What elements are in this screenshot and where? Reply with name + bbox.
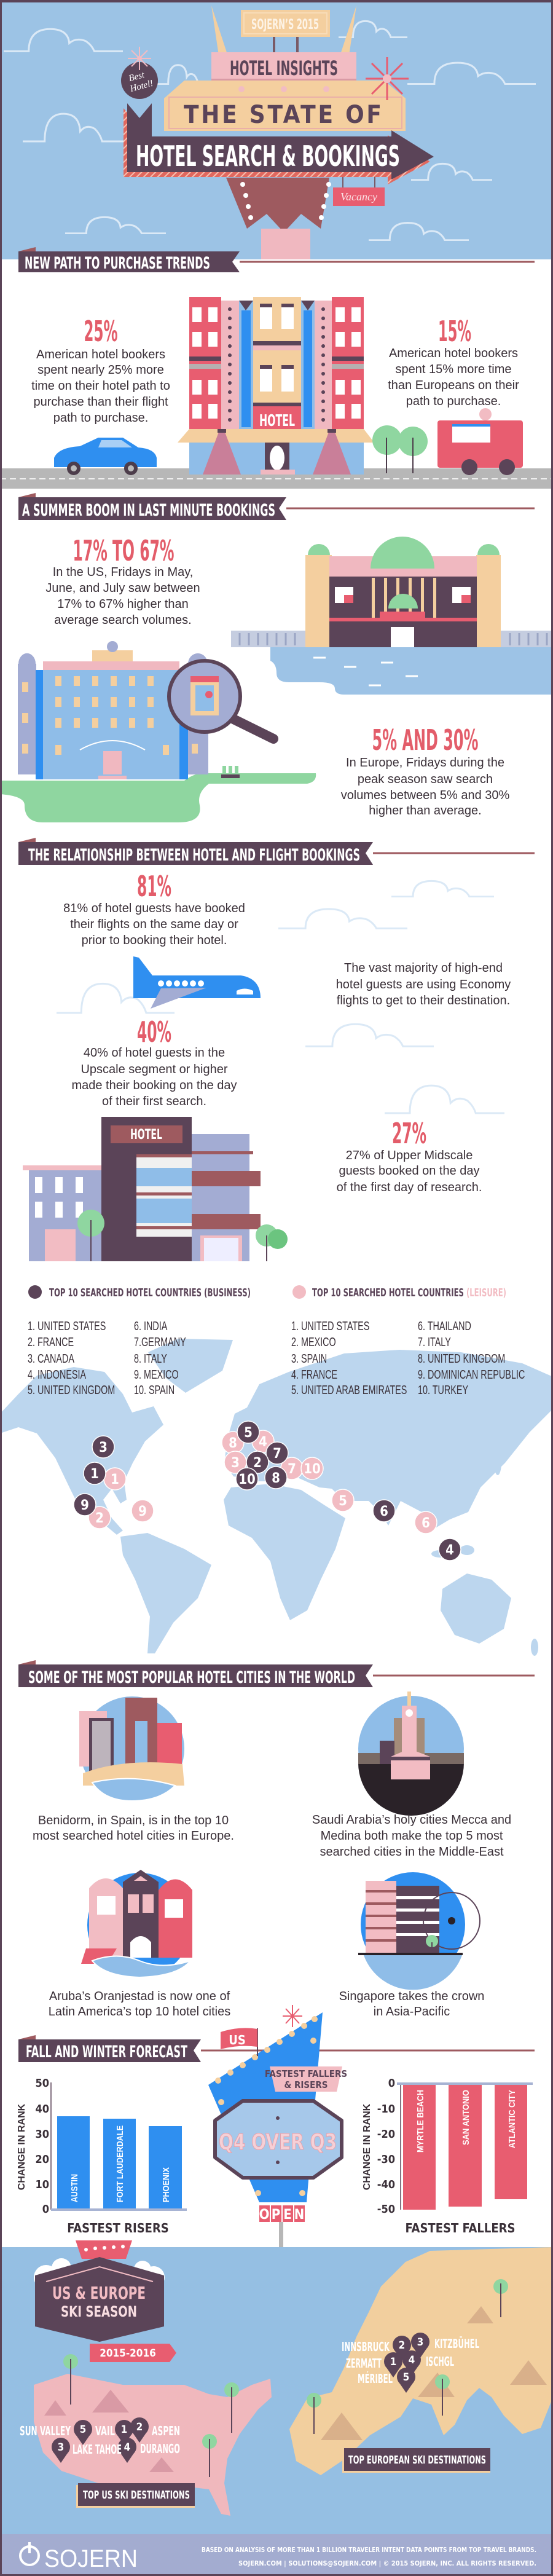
header: sky background [0, 0, 553, 259]
list: leisure countries: 7. ITALY [418, 1335, 451, 1349]
stat: 40% [71, 1015, 237, 1108]
us ski destination pins: SUN VALLEY [20, 2424, 71, 2438]
map markers: business: 5 [244, 1425, 253, 1441]
map markers: leisure: 3 [231, 1455, 240, 1471]
best hotel badge [121, 62, 158, 99]
us ski destination pins: 1 [121, 2424, 127, 2436]
map markers: business: 3 [99, 1440, 108, 1455]
star [283, 2005, 302, 2027]
city icon: benidorm [79, 1696, 184, 1801]
world map [0, 1339, 553, 1656]
map markers: business: 10 [238, 1472, 256, 1487]
stat: 5% and 30%: In Europe, Fridays during the [346, 756, 504, 770]
stat: 15%: than Europeans on their [388, 379, 519, 392]
chart: fastest fallers: -20 [377, 2128, 395, 2141]
ski section background [0, 2247, 553, 2534]
starburst icons [128, 47, 409, 100]
us ski destination pins [20, 2417, 180, 2463]
list: leisure countries: 5. UNITED ARAB EMIRATES [291, 1383, 407, 1397]
european ski destination pins: 2 [399, 2339, 405, 2352]
stat: 17% to 67% [45, 534, 200, 627]
map markers: business: 7 [273, 1446, 281, 1462]
best hotel badge: Hotel! [128, 79, 154, 94]
chart: fastest fallers: SAN ANTONIO [461, 2090, 471, 2145]
text: mecca and medina [312, 1813, 511, 1859]
us ski destination pins: DURANGO [140, 2441, 180, 2456]
chart: fastest fallers: FASTEST FALLERS [406, 2221, 515, 2235]
label: top european ski destinations: TOP EUROPEAN SKI DESTINATIONS [348, 2454, 486, 2467]
list: leisure countries: 3. SPAIN [291, 1352, 327, 1366]
stat: 25% [31, 315, 170, 425]
stat: 81% [63, 870, 245, 947]
legend: top 10 searched hotel countries: TOP 10 SEARCHED HOTEL COUNTRIES (BUSINESS) [49, 1286, 251, 1299]
list: leisure countries: 9. DOMINICAN REPUBLIC [418, 1368, 525, 1382]
section heading: a summer boom: A SUMMER BOOM IN LAST MINUTE BOOKINGS [22, 501, 275, 520]
ski season sign: SKI SEASON [61, 2303, 137, 2320]
city icon: oranjestad aruba [81, 1870, 192, 1977]
arrow: hotel search & bookings [124, 103, 434, 184]
section heading: most popular hotel cities: SOME OF THE MOST POPULAR HOTEL CITIES IN THE WORLD [28, 1668, 355, 1687]
map markers: leisure [88, 1430, 437, 1534]
stat: 27%: 27% of Upper Midscale [346, 1149, 473, 1162]
stat: 5% and 30%: 5% AND 30% [372, 723, 478, 757]
text: mecca and medina: Saudi Arabia’s holy cities Mecca and [312, 1813, 511, 1827]
list: leisure countries: 10. TURKEY [418, 1383, 468, 1397]
chart: fastest risers [17, 2077, 187, 2235]
chart: fastest fallers: -50 [377, 2203, 395, 2216]
european ski destination pins: INNSBRUCK [342, 2339, 390, 2354]
list: business countries [28, 1319, 186, 1397]
stat: 81%: 81% [137, 870, 171, 903]
stat: 17% to 67%: In the US, Fridays in May, [53, 565, 193, 579]
open sign: O [259, 2207, 269, 2223]
illustration: european palace hotel on water [231, 537, 553, 695]
map markers: leisure: 9 [138, 1504, 147, 1519]
hexagon sign: Q4 OVER Q3 [219, 2130, 337, 2155]
center sign: q4 over q3 [208, 2005, 347, 2247]
footer notes: SOJERN.COM | SOLUTIONS@SOJERN.COM | © 2015 SOJERN, INC. ALL RIGHTS RESERVED. [238, 2559, 536, 2567]
map markers: business: 4 [445, 1543, 454, 1558]
chart: fastest risers: FASTEST RISERS [67, 2221, 169, 2235]
european ski destination pins: ZERMATT [346, 2356, 382, 2371]
section heading: fall and winter forecast: FALL AND WINTER FORECAST [26, 2042, 187, 2062]
logo: sojern: SOJERN [44, 2545, 138, 2572]
label: fastest fallers & risers [265, 2066, 347, 2092]
stat: 5% and 30%: volumes between 5% and 30% [341, 789, 510, 802]
stat: 25%: path to purchase. [53, 411, 148, 425]
stat: 25%: American hotel bookers [36, 348, 165, 361]
text: economy flights: The vast majority of high-end [344, 961, 503, 975]
stat: 17% to 67%: 17% TO 67% [73, 534, 175, 567]
stat: 15%: 15% [438, 315, 471, 348]
legend: top 10 searched hotel countries [28, 1285, 506, 1299]
list: business countries: 1. UNITED STATES [28, 1319, 106, 1333]
text: singapore: in Asia-Pacific [374, 2005, 450, 2019]
chart: fastest risers: 0 [42, 2203, 49, 2216]
stat: 81%: prior to booking their hotel. [82, 934, 227, 947]
map markers: leisure: 10 [304, 1462, 321, 1477]
stat: 27% [337, 1117, 482, 1194]
text: aruba: Aruba’s Oranjestad is now one of [49, 1990, 230, 2003]
map markers: business: 8 [272, 1471, 280, 1486]
list: leisure countries: 6. THAILAND [418, 1319, 471, 1333]
map markers: leisure: 1 [111, 1472, 119, 1487]
text: economy flights [336, 961, 511, 1007]
text: aruba [49, 1990, 230, 2019]
label: top european ski destinations [342, 2448, 490, 2473]
chart: fastest risers: 10 [35, 2178, 49, 2191]
list: business countries: 6. INDIA [134, 1319, 168, 1333]
stat: 81%: 81% of hotel guests have booked [63, 902, 245, 915]
footer notes [202, 2546, 536, 2567]
chart: fastest fallers: 0 [388, 2077, 395, 2090]
city icon: singapore [358, 1872, 480, 1990]
chart: fastest fallers: -40 [377, 2178, 395, 2191]
label: fastest fallers & risers: FASTEST FALLERS [265, 2068, 347, 2079]
stat: 17% to 67%: 17% to 67% higher than [57, 597, 189, 611]
flag: us [221, 2028, 257, 2056]
european ski destination pins: 3 [417, 2336, 423, 2349]
ski season sign [34, 2240, 176, 2362]
stat: 17% to 67%: June, and July saw between [45, 581, 200, 595]
label: top us ski destinations: TOP US SKI DESTINATIONS [83, 2489, 190, 2502]
text: benidorm [33, 1814, 234, 1843]
open sign: E [283, 2207, 292, 2223]
list: leisure countries [291, 1319, 525, 1397]
illustration: hotel building: HOTEL [259, 412, 295, 430]
european ski destination pins [342, 2333, 479, 2393]
european ski destination pins: 5 [403, 2371, 409, 2384]
text: economy flights: hotel guests are using Economy [336, 978, 511, 991]
stat: 40%: of their first search. [102, 1095, 206, 1108]
illustration: hotel building [178, 297, 374, 475]
stat: 27%: of the first day of research. [337, 1181, 482, 1194]
us ski destination pins: 2 [136, 2421, 143, 2433]
map markers: leisure: 8 [229, 1436, 237, 1451]
illustration: modern hotel buildings: HOTEL [130, 1127, 162, 1143]
list: leisure countries: 1. UNITED STATES [291, 1319, 369, 1333]
stat: 25%: time on their hotel path to [31, 379, 170, 393]
list: leisure countries: 4. FRANCE [291, 1368, 337, 1382]
chart: fastest fallers: -30 [377, 2153, 395, 2166]
text: singapore: Singapore takes the crown [339, 1990, 484, 2003]
european ski destination pins: 1 [390, 2356, 396, 2368]
stat: 15% [388, 315, 519, 408]
chart: fastest fallers [362, 2077, 533, 2235]
stat: 81%: their flights on the same day or [70, 918, 238, 931]
text: mecca and medina: Medina both make the top 5 most [321, 1829, 503, 1843]
us ski destination pins: 4 [124, 2441, 130, 2454]
hotel insights plaque [211, 52, 356, 82]
ski season sign: US & EUROPE [52, 2283, 146, 2303]
map markers: leisure: 4 [259, 1435, 267, 1450]
chart: fastest risers: 30 [35, 2128, 49, 2141]
vacancy sign: Vacancy [340, 191, 377, 203]
road [0, 468, 553, 489]
chart: fastest risers: 50 [35, 2077, 49, 2090]
sojern 2015 plaque [241, 10, 330, 37]
europe map land [289, 2247, 553, 2475]
city icon: mecca [358, 1692, 464, 1816]
section heading: relationship between hotel and flight bookings [18, 838, 535, 865]
stat: 15%: spent 15% more time [396, 363, 511, 376]
stat: 25%: spent nearly 25% more [37, 363, 164, 377]
map markers: business: 9 [80, 1498, 89, 1513]
map markers: leisure: 7 [288, 1462, 296, 1477]
label: top us ski destinations [76, 2483, 195, 2508]
text: aruba: Latin America’s top 10 hotel cities [49, 2005, 230, 2019]
chart: fastest risers: PHOENIX [161, 2167, 171, 2202]
list: business countries: 2. FRANCE [28, 1335, 74, 1349]
chart: fastest fallers: MYRTLE BEACH [415, 2090, 426, 2153]
stat: 5% and 30%: peak season saw search [358, 773, 493, 786]
title sign [121, 6, 434, 259]
us ski destination pins: 5 [80, 2424, 86, 2436]
chart: fastest risers: AUSTIN [69, 2174, 80, 2202]
stat: 5% and 30%: higher than average. [369, 804, 482, 817]
list: business countries: 10. SPAIN [134, 1383, 175, 1397]
text: singapore [339, 1990, 484, 2019]
W frame and pole [226, 178, 331, 259]
illustration: blue car [54, 438, 157, 475]
us ski destination pins: VAIL [95, 2424, 115, 2438]
map markers: leisure: 5 [339, 1494, 347, 1509]
list: business countries: 9. MEXICO [134, 1368, 179, 1382]
ribbon: 2015-2016 [90, 2344, 176, 2362]
stat: 40%: made their booking on the day [71, 1079, 237, 1092]
logo: sojern [20, 2542, 138, 2572]
map markers: business [74, 1421, 461, 1561]
open sign: N [294, 2207, 304, 2223]
us ski destination pins: ASPEN [152, 2424, 180, 2438]
stat: 25%: purchase than their flight [33, 395, 168, 409]
stat: 40%: 40% [137, 1015, 171, 1049]
list: business countries: 3. CANADA [28, 1352, 74, 1366]
chart: fastest risers: CHANGE IN RANK [17, 2103, 27, 2190]
decorative clouds: flight section [57, 881, 504, 1113]
list: business countries: 4. INDONESIA [28, 1368, 86, 1382]
stat: 27%: guests booked on the day [339, 1164, 480, 1178]
chart: fastest fallers: -10 [377, 2103, 395, 2116]
stat: 25%: 25% [84, 315, 118, 348]
text: benidorm: Benidorm, in Spain, is in the top 10 [38, 1814, 229, 1827]
ribbon: 2015-2016: 2015-2016 [100, 2347, 156, 2360]
list: business countries: 5. UNITED KINGDOM [28, 1383, 115, 1397]
stat: 15%: path to purchase. [406, 395, 501, 408]
text: benidorm: most searched hotel cities in Europe. [33, 1829, 234, 1843]
us map land [34, 2354, 272, 2516]
big sign: the state of [164, 81, 406, 131]
stat: 40%: Upscale segment or higher [80, 1063, 228, 1076]
footer [0, 2534, 553, 2576]
big sign: the state of: THE STATE OF [184, 101, 386, 129]
chart: fastest fallers: ATLANTIC CITY [507, 2090, 517, 2148]
stat: 27%: 27% [392, 1117, 426, 1150]
section heading: a summer boom [18, 493, 535, 520]
arrow: hotel search & bookings: HOTEL SEARCH & BOOKINGS [136, 140, 400, 173]
map markers: leisure: 2 [95, 1511, 104, 1526]
text: economy flights: flights to get to their destination. [337, 994, 510, 1007]
chart: fastest risers: 20 [35, 2153, 49, 2166]
section heading: new path to purchase trends [18, 247, 535, 273]
european ski destination pins: 4 [409, 2354, 415, 2366]
section heading: fall and winter forecast [18, 2035, 535, 2062]
list: business countries: 7.GERMANY [134, 1335, 186, 1349]
stat: 15%: American hotel bookers [389, 347, 518, 360]
best hotel badge: Best [128, 70, 146, 84]
section heading: new path to purchase trends: NEW PATH TO PURCHASE TRENDS [25, 254, 210, 273]
chart: fastest risers: FORT LAUDERDALE [115, 2125, 125, 2202]
list: leisure countries: 8. UNITED KINGDOM [418, 1352, 505, 1366]
map markers: leisure: 6 [422, 1516, 430, 1531]
section heading: most popular hotel cities [18, 1660, 535, 1687]
chart: fastest risers: 40 [35, 2103, 49, 2116]
legend: top 10 searched hotel countries: TOP 10 SEARCHED HOTEL COUNTRIES (LEISURE) [312, 1286, 506, 1299]
text: mecca and medina: searched cities in the Middle-East [320, 1845, 504, 1859]
label: fastest fallers & risers: & RISERS [284, 2079, 327, 2090]
us ski destination pins: LAKE TAHOE [73, 2442, 122, 2457]
stat: 5% and 30% [341, 723, 510, 817]
map markers: business: 6 [380, 1504, 388, 1519]
hexagon sign [215, 2101, 342, 2178]
chart: fastest fallers: CHANGE IN RANK [362, 2103, 372, 2190]
list: business countries: 8. ITALY [134, 1352, 167, 1366]
sojern 2015 plaque: SOJERN’S 2015 [251, 17, 319, 33]
illustration: airplane [133, 956, 261, 1009]
illustration: trees [372, 425, 428, 473]
european ski destination pins: KITZBÜHEL [434, 2336, 479, 2351]
illustration: modern hotel buildings [23, 1117, 288, 1261]
illustration: food truck [437, 408, 523, 475]
vacancy sign [333, 177, 385, 206]
illustration: grand hotel with magnifier [0, 641, 316, 822]
european ski destination pins: MÉRIBEL [358, 2371, 393, 2386]
hotel insights plaque: HOTEL INSIGHTS [230, 57, 338, 80]
open sign: P [272, 2207, 280, 2223]
map markers: business: 2 [253, 1455, 262, 1471]
section heading: relationship between hotel and flight bookings: THE RELATIONSHIP BETWEEN HOTEL AND FLIGHT BOOKINGS [28, 846, 360, 865]
stat: 17% to 67%: average search volumes. [54, 613, 192, 627]
list: leisure countries: 2. MEXICO [291, 1335, 336, 1349]
open sign [259, 2205, 305, 2223]
european ski destination pins: ISCHGL [426, 2354, 454, 2369]
us ski destination pins: 3 [58, 2441, 64, 2454]
stat: 40%: 40% of hotel guests in the [84, 1046, 225, 1060]
flag: us: US [229, 2033, 246, 2047]
map markers: business: 1 [90, 1467, 99, 1482]
